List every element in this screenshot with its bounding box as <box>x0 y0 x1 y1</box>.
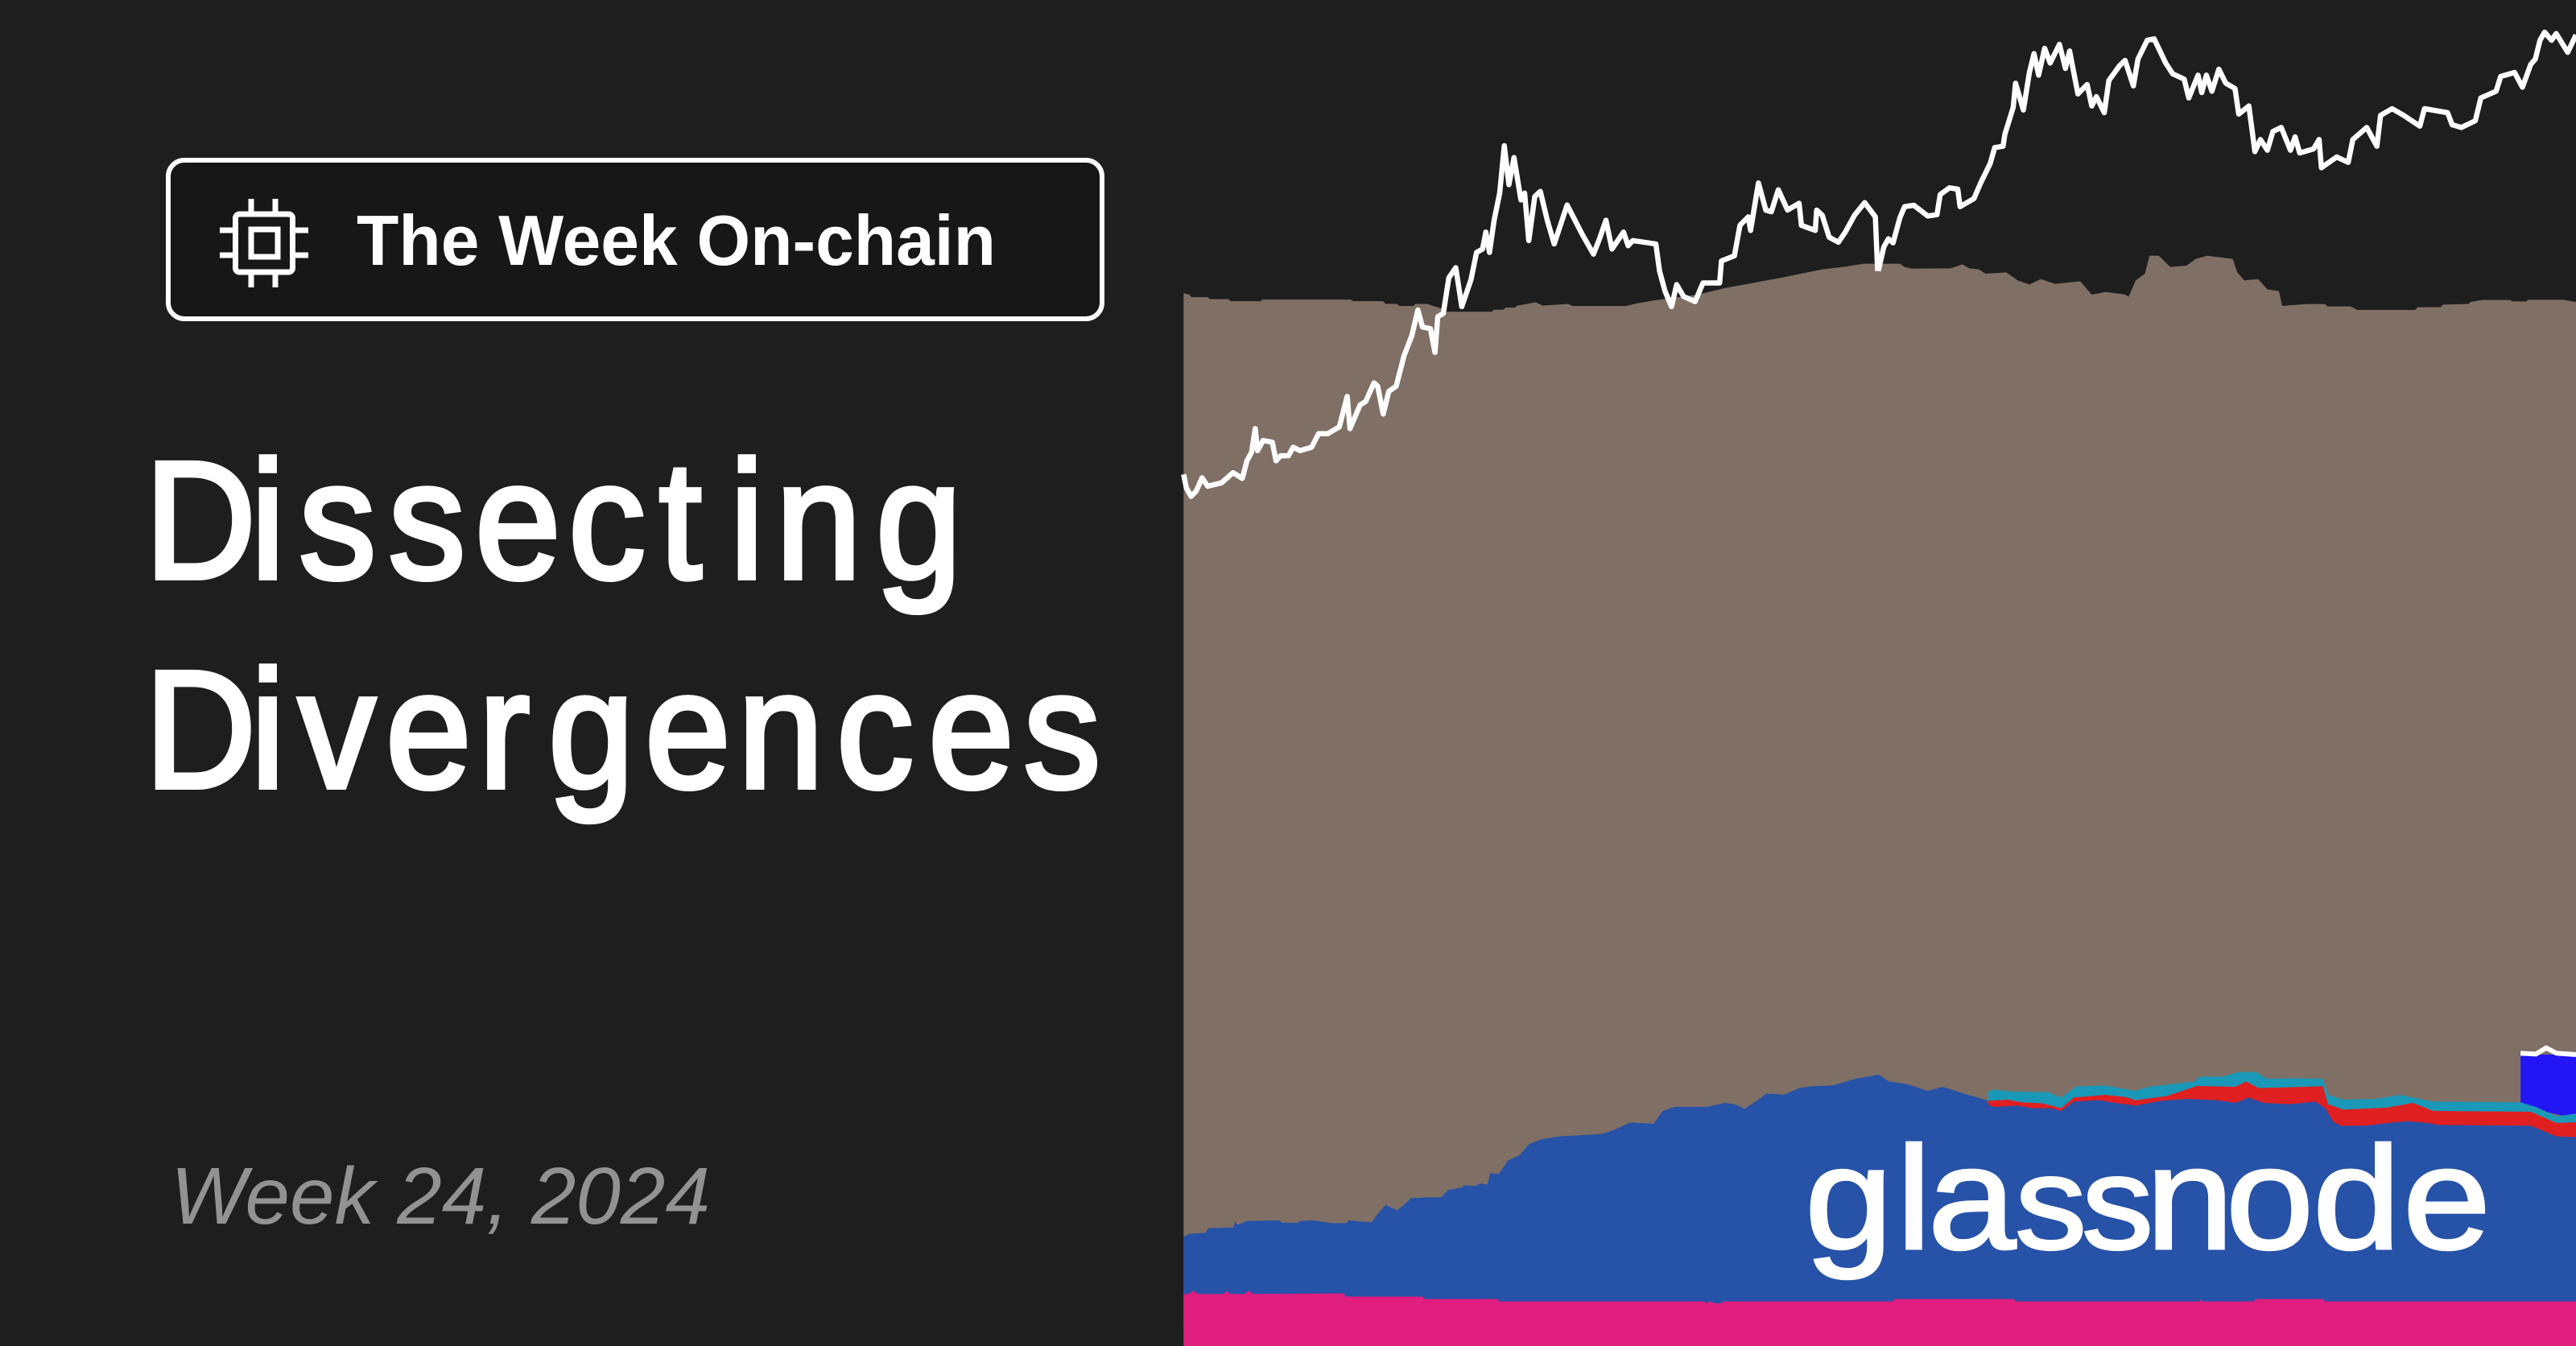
white price line <box>1183 32 2576 497</box>
badge: The Week On-chain <box>168 160 1102 319</box>
date: Week 24, 2024 <box>171 1151 710 1241</box>
title line 1: Dissecting <box>145 427 962 614</box>
pink area <box>1183 1290 2576 1346</box>
title line 2: Divergences <box>145 637 1100 824</box>
white marker line <box>2520 1048 2576 1055</box>
cyan band <box>1988 1072 2576 1165</box>
icon: chip <box>220 199 308 287</box>
badge label: The Week On-chain <box>357 200 996 280</box>
bright blue block <box>2520 1055 2576 1119</box>
blue area <box>1183 1075 2576 1326</box>
red band <box>1988 1081 2576 1165</box>
brown supply area <box>1183 256 2576 1346</box>
panel: chart <box>1183 32 2576 1346</box>
glassnode logo: ss <box>2015 1129 2153 1278</box>
glassnode logo: gla <box>1805 1117 2017 1280</box>
title <box>145 427 1100 824</box>
glassnode logo: node <box>2146 1117 2491 1280</box>
badge frame <box>168 160 1102 319</box>
